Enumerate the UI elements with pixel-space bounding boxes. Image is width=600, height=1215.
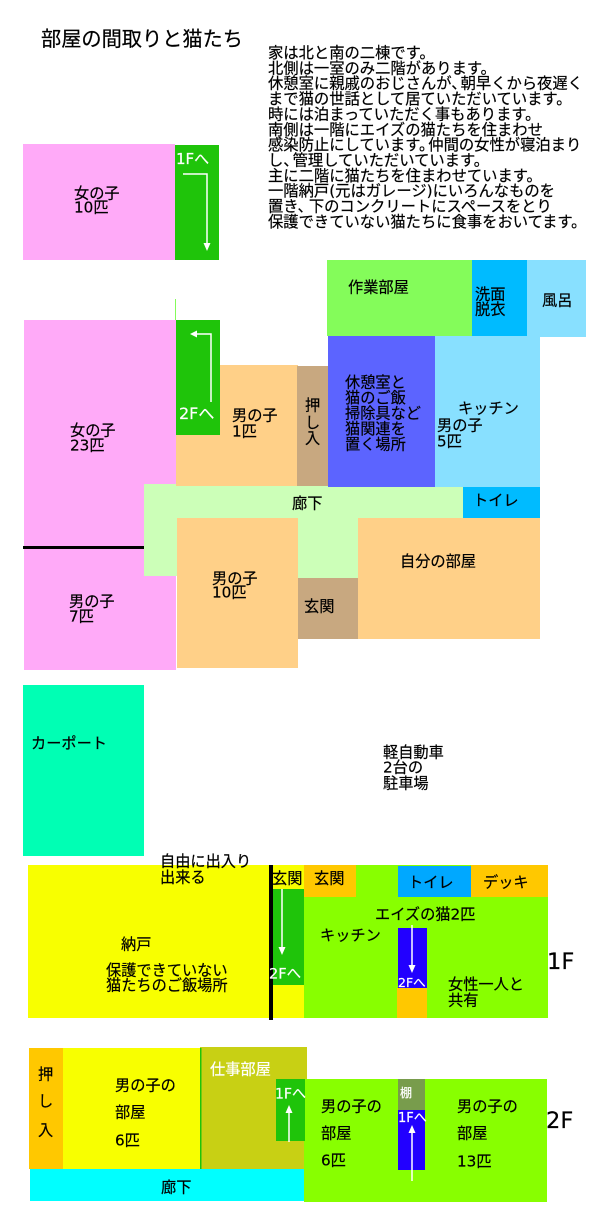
room: south 1F main: キッチン [320, 926, 381, 944]
room: washroom: 洗面 [475, 286, 505, 304]
room: storage [28, 865, 270, 1018]
closet [297, 366, 328, 486]
decorative-edge: green sliver [175, 299, 176, 320]
entrance [298, 578, 358, 639]
corridor 2F [30, 1169, 305, 1201]
stairs: to 1F [175, 145, 219, 260]
room: workroom: 作業部屋 [348, 278, 409, 296]
stairs: green to 1F [275, 1079, 306, 1142]
room: south 1F main [304, 865, 548, 1018]
intro text block: 保護できていない猫たちに食事をおいてます。 [268, 213, 586, 231]
room: girls 10: 女の子 [74, 184, 120, 202]
note: free entry: 自由に出入り [160, 852, 251, 870]
floor label 1F: 1F [547, 949, 574, 975]
entrance 2: 玄関 [314, 870, 344, 888]
room: south 2F: 6匹 [321, 1152, 346, 1170]
room: rest room: 猫関連を [345, 420, 406, 438]
room: boys 7: 7匹 [69, 608, 94, 626]
stairs: blue to 2F: 2Fへ [398, 975, 426, 990]
entrance 2 [304, 865, 356, 897]
panel: south building 2F [29, 1047, 573, 1202]
room: rest room: 猫のご飯 [345, 389, 406, 407]
room: boys 10: 10匹 [212, 584, 247, 602]
panel: upper girls room annex [23, 144, 219, 260]
room: kitchen: キッチン [458, 400, 519, 418]
room: kitchen: 5匹 [437, 432, 462, 450]
closet: 入 [38, 1122, 53, 1140]
corridor 2F: 廊下 [161, 1178, 191, 1196]
stairs: to 1F: 1Fへ [176, 150, 209, 168]
wall [269, 865, 273, 1020]
room: boys 6 west [63, 1048, 201, 1169]
toilet 1F: トイレ [408, 874, 454, 892]
intro text block: まで猫の世話として居ていただいています。 [268, 90, 572, 108]
room: south 2F [304, 1079, 547, 1202]
room: kitchen: 男の子 [437, 416, 483, 434]
room: boys 10 [177, 518, 298, 668]
room: boys 10: 男の子 [212, 570, 258, 588]
room: storage: 保護できていない [106, 962, 228, 980]
intro text block: 一階納戸(元はガレージ)にいろんなものを [268, 182, 555, 200]
room: rest room [328, 336, 435, 487]
room: rest room: 掃除具など [345, 404, 421, 422]
room: south 2F: 男の子の [457, 1098, 518, 1116]
room: my room [358, 518, 540, 639]
room: boys 1: 1匹 [232, 422, 257, 440]
room: storage: 猫たちのご飯場所 [106, 976, 228, 994]
room: washroom: 脱衣 [475, 300, 505, 318]
deck: デッキ [483, 874, 529, 892]
intro text block: し、管理していただいています。 [268, 152, 489, 170]
closet: し [305, 414, 320, 432]
intro text block: 北側は一室のみ二階があります。 [268, 59, 496, 77]
stairs: blue to 1F: 1Fへ [398, 1111, 427, 1126]
closet: 押 [38, 1066, 53, 1084]
room: boys 1 [176, 365, 298, 486]
title: 部屋の間取りと猫たち [41, 27, 243, 51]
room: girls 10: 10匹 [74, 198, 109, 216]
stairs: to 2F: 2Fへ [179, 404, 214, 423]
corridor: 廊下 [292, 494, 322, 512]
room: south 2F: 部屋 [321, 1124, 351, 1142]
room: boys 6 west: 6匹 [115, 1132, 140, 1150]
room: boys 6 west: 男の子の [115, 1076, 176, 1094]
room: bath: 風呂 [542, 292, 572, 310]
parking label: 軽自動車 [383, 744, 444, 762]
room: boys 7: 男の子 [69, 592, 115, 610]
room: south 2F: 13匹 [457, 1152, 492, 1170]
carport [23, 685, 144, 856]
closet: 押 [305, 396, 320, 414]
intro text block: 家は北と南の二棟です。 [268, 44, 435, 62]
closet [29, 1048, 63, 1169]
toilet [463, 487, 540, 518]
stairs: blue to 2F [397, 925, 427, 1018]
parking label: 2台の [383, 758, 423, 776]
room: south 2F: 部屋 [457, 1124, 487, 1142]
entrance strip and stairs: 玄関 [272, 870, 302, 888]
room: washroom [472, 260, 529, 337]
room: my room: 自分の部屋 [400, 552, 476, 570]
closet: し [38, 1092, 53, 1110]
entrance strip and stairs: 2Fへ [269, 966, 301, 982]
panel: north building floor plan [23, 260, 586, 670]
room: rest room: 置く場所 [345, 436, 406, 454]
room: work room [200, 1047, 307, 1169]
toilet 1F [398, 866, 471, 897]
corridor [144, 484, 465, 578]
room: girls 10 [23, 144, 175, 260]
intro text block: 時には泊まっていただく事もあります。 [268, 105, 540, 123]
room: girls 23: 23匹 [70, 436, 105, 454]
closet: 入 [305, 430, 320, 448]
entrance: 玄関 [304, 598, 334, 616]
room: south 1F main: エイズの猫2匹 [375, 906, 475, 924]
room: rest room: 休憩室と [345, 374, 406, 392]
intro text block: 感染防止にしています。仲間の女性が寝泊まり [268, 136, 581, 154]
intro text block: 休憩室に親戚のおじさんが、朝早くから夜遅く [268, 75, 583, 93]
shelf [398, 1079, 425, 1110]
divider wall [23, 546, 144, 549]
room: girls 23 [24, 320, 176, 546]
room: girls 23: 女の子 [70, 422, 116, 440]
entrance strip and stairs [269, 865, 304, 1018]
stairs: green to 1F: 1Fへ [275, 1086, 306, 1102]
panel: south building 1F [28, 852, 574, 1020]
parking label: 駐車場 [383, 774, 429, 792]
room: boys 1: 男の子 [232, 406, 278, 424]
carport: カーポート [31, 734, 107, 752]
stairs: to 2F [176, 320, 220, 435]
room: storage: 納戸 [121, 936, 151, 954]
room: south 1F main: 女性一人と [448, 976, 524, 994]
room: south 1F main: 共有 [448, 992, 478, 1010]
room: boys 7 [24, 549, 176, 670]
room: kitchen [435, 336, 540, 487]
floor label 2F: 2F [546, 1108, 573, 1134]
deck [471, 865, 548, 897]
toilet: トイレ [473, 492, 519, 510]
room: south 2F: 男の子の [321, 1098, 382, 1116]
stairs: blue to 1F [398, 1110, 427, 1181]
room: workroom [327, 260, 472, 336]
note: free entry: 出来る [160, 868, 206, 886]
shelf: 棚 [400, 1085, 412, 1100]
intro text block: 南側は一階にエイズの猫たちを住まわせ [268, 121, 543, 139]
intro text block: 置き、下のコンクリートにスペースをとり [268, 198, 552, 216]
room: work room: 仕事部屋 [210, 1060, 271, 1078]
room: boys 6 west: 部屋 [115, 1104, 145, 1122]
room: bath [527, 260, 586, 337]
intro text block: 主に二階に猫たちを住まわせています。 [268, 167, 542, 185]
